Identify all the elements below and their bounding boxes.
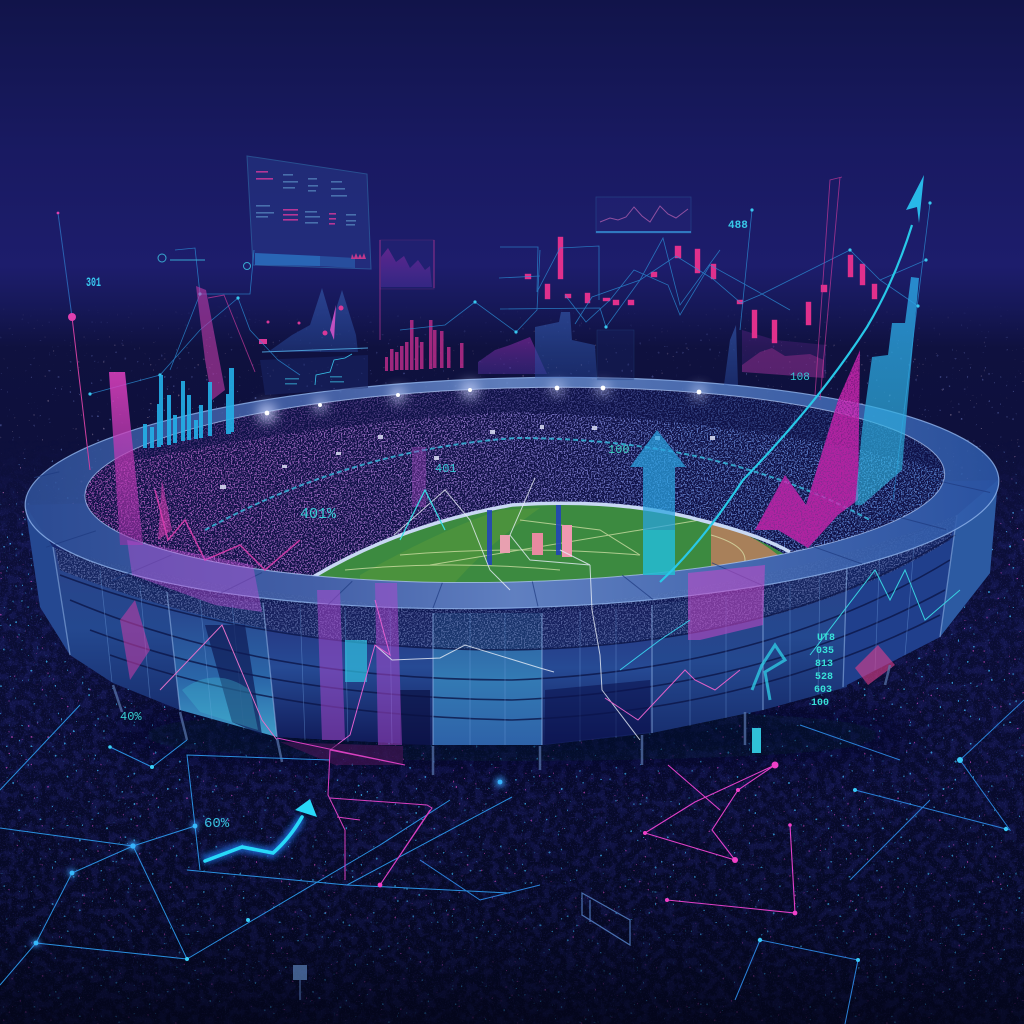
purple stripe in stands [412,447,426,507]
dotted stand ring [205,438,870,530]
facade panel: centre left [263,603,433,745]
chart: blue mountain area [259,288,368,352]
big cyan up arrow [630,430,686,575]
facade mullions [53,515,957,745]
label: 401 centre: 401 [435,462,457,476]
panel: floating data table [247,156,371,269]
facade panel: centre [433,613,542,745]
placard in crowd [293,965,307,1000]
large rising trend arrow [660,175,924,582]
table progress bar [255,253,320,266]
cyan growth staircase [855,277,919,505]
pink speckle on mountain [755,350,860,548]
facade panel: centre right [542,605,652,745]
small gauge icons [158,254,250,270]
area markers [259,306,344,344]
magenta line lower right [605,670,740,720]
table rows pink [256,171,336,225]
data readout on right facade: 813 [815,659,833,670]
ground right nodes [758,757,1008,962]
facade chart lines [160,570,960,750]
label: 403 on stands: 401% [300,506,337,523]
blue and pink candles on pitch [487,505,572,565]
football pitch [312,502,791,582]
stadium glass facade [25,480,998,745]
cyan bar below facade [752,728,761,753]
network: pink constellation right [645,765,795,913]
pink bar left [109,372,143,545]
label: 40% below facade: 40% [120,710,142,724]
network: glow on nodes [32,777,505,947]
data readout on right facade: UT8 [817,633,835,644]
pitch shade bands [360,508,540,582]
facade panel: right 3 [843,515,957,687]
support columns [113,665,890,775]
line chart nodes [88,201,932,396]
data readout on right facade: 100 [811,698,829,709]
dark lower stands seen through glass [545,680,650,744]
data readout on right facade [811,633,835,709]
pitch white rim [313,503,790,577]
cyan glyph sketch on right facade [752,645,785,700]
cyan line far right facade [810,570,960,655]
facade panel: left [53,547,180,710]
facade panel: right [652,590,763,733]
network: ground left [0,705,512,985]
city lights on the horizon [0,300,1024,550]
candlesticks [525,237,877,343]
stadium floodlights [220,382,715,489]
network: pink wireframe under stadium [277,738,432,885]
facade panel: left centre [167,592,277,737]
facade panel: far right [940,480,998,637]
label: 108: 108 [790,372,810,384]
pink chart line in stands left [155,490,300,570]
pink translucent roof overlays [120,540,895,745]
dark shadow beneath the stadium [112,709,912,761]
facade panel: far left [25,505,70,655]
chart: magenta bars [385,320,464,371]
chart: small purple area panel [380,240,434,289]
facade floors [60,535,955,720]
pink constellation nodes [378,762,797,915]
table rows blue [256,174,356,226]
stadium seating bowl [85,385,945,600]
chart: small line panel top centre [596,197,691,233]
goal frame in crowd [582,893,630,945]
pink triangle in stands [158,480,172,540]
pitch markings [345,520,745,570]
label: 100: 100 [608,443,630,457]
network: ground nodes left [34,745,502,961]
label: 488: 488 [728,220,748,232]
label: 301: 301 [86,275,101,290]
roof segment lines [34,447,993,619]
penalty end of pitch [711,525,778,566]
upper tier band [85,385,945,470]
stadium roof ring [22,365,1002,621]
crowd specks seen through glass [55,515,957,650]
chart: purple and blue skyline areas [478,312,826,385]
data readout on right facade: 603 [814,685,832,696]
magenta chart line [208,177,842,400]
crowd surrounding the stadium [0,440,1024,1024]
magenta floating block under facade [280,742,403,765]
network: ground right [420,700,1024,1024]
pink line on left facade [160,625,277,740]
pink line centre [330,600,390,750]
crowd seen through glass [55,515,957,650]
pink tall bar left back [196,286,225,400]
data readout on right facade: 035 [816,646,834,657]
mini pink bars [351,253,366,259]
growth arrow on crowd [203,799,317,861]
cyan line over stands [400,490,445,540]
bright teal glass reflections [182,678,258,730]
panel: dark lower chart panel [260,354,368,395]
label: 60%: 60% [204,816,230,832]
cyan line right [620,620,690,670]
pink pin line left [57,212,90,470]
data readout on right facade: 528 [815,672,833,683]
white line chart over pitch and facade [375,478,640,740]
pink growth mountain [755,350,860,548]
chart: cyan bar cluster [143,368,234,448]
facade panel: right 2 [763,565,847,710]
network of chart lines in the sky [90,203,930,500]
